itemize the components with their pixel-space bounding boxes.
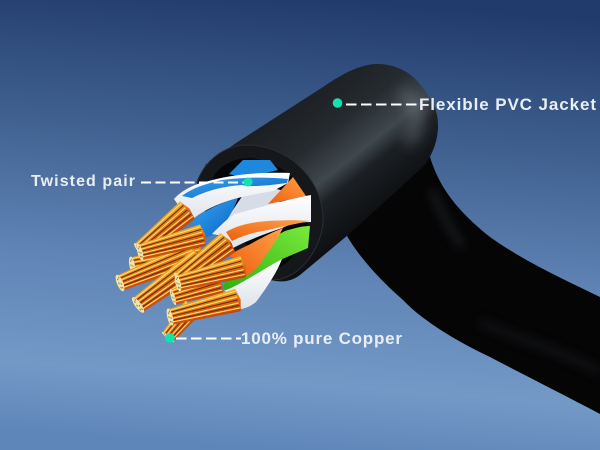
callout: Flexible PVC Jacket: Flexible PVC Jacket: [419, 95, 596, 114]
callout: Flexible PVC Jacket: [333, 95, 596, 114]
callout: 100% pure Copper: 100% pure Copper: [241, 329, 402, 348]
wire: green: [222, 226, 310, 292]
copper strands: [113, 200, 248, 345]
wire: white lower: [224, 259, 282, 310]
wire: solid orange: [228, 228, 283, 276]
wire: orange top: [268, 177, 306, 204]
callout: Twisted pair: [31, 173, 252, 190]
wire: orange-white wide: [212, 195, 311, 248]
wire: rear blue: [229, 160, 278, 178]
wire: solid blue: [190, 198, 238, 238]
stripe: orange on white: [226, 220, 310, 241]
wire: white rear: [222, 189, 290, 226]
stripe: blue on white: [182, 178, 288, 198]
PVC jacket sleeve: [205, 64, 438, 281]
jacket rim: [197, 145, 323, 280]
conductors: twisted pairs: [174, 160, 311, 310]
callout: 100% pure Copper: [165, 329, 402, 348]
black cable body: [347, 150, 600, 414]
wire: blue-white twisted: [174, 173, 290, 222]
callout: Twisted pair: Twisted pair: [31, 173, 135, 190]
